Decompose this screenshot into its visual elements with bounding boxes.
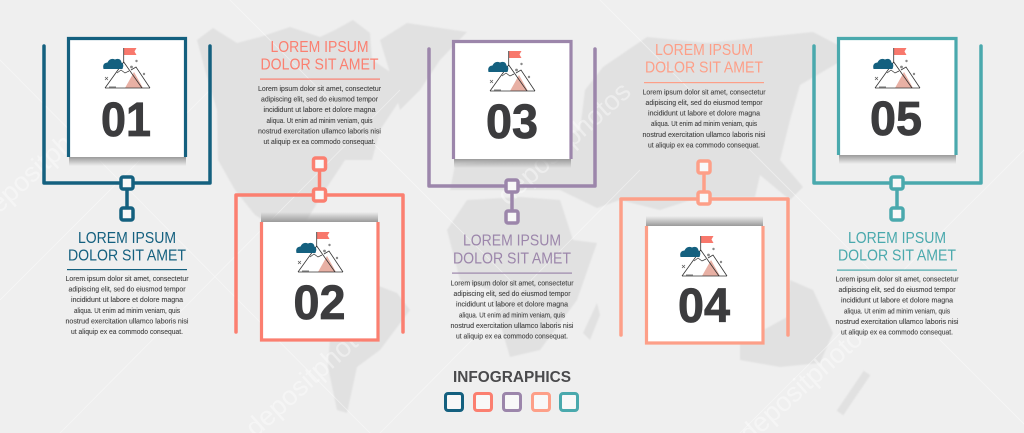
heading 04: DOLOR SIT AMET	[645, 60, 763, 77]
panel: step 03	[429, 42, 595, 340]
rule 01	[67, 269, 187, 270]
number 03: 03	[486, 96, 538, 149]
body text 02: nostrud exercitation ullamco laboris nisi	[258, 126, 381, 135]
rule 03	[452, 272, 572, 274]
connector 04	[698, 161, 710, 204]
rule 02	[260, 78, 380, 80]
panel: step 02	[236, 39, 403, 340]
frame 05	[814, 46, 981, 183]
card 03	[454, 42, 571, 159]
body text 01: ut aliquip ex ea commodo consequat.	[71, 327, 183, 336]
number 05: 05	[870, 93, 922, 146]
body text 04: aliqua. Ut enim ad minim veniam, quis	[651, 119, 757, 128]
body text 04: incididunt ut labore et dolore magna	[648, 109, 761, 118]
icon: mountain flag 01	[103, 48, 150, 88]
body text 01: nostrud exercitation ullamco laboris nisi	[66, 316, 189, 325]
world map	[197, 20, 867, 413]
body text 02: incididunt ut labore et dolore magna	[264, 105, 376, 114]
body text 03: nostrud exercitation ullamco laboris nisi	[450, 321, 574, 330]
body text 05: ut aliquip ex ea commodo consequat.	[841, 328, 953, 336]
heading 03	[453, 232, 571, 268]
card shadow 05	[839, 155, 956, 164]
icon: mountain flag 04	[680, 236, 727, 276]
heading 02: LOREM IPSUM	[270, 39, 368, 56]
heading 05: DOLOR SIT AMET	[838, 248, 956, 265]
card 05	[838, 38, 956, 155]
body text 04	[642, 87, 766, 149]
card 04	[646, 226, 763, 343]
body text 04: Lorem ipsum dolor sit amet, consectetur	[642, 87, 766, 96]
frame 02	[236, 195, 403, 332]
body text 01: aliqua. Ut enim ad minim veniam, quis	[74, 306, 180, 315]
body text 04: adipiscing elit, sed do eiusmod tempor	[646, 98, 763, 107]
body text 03: aliqua. Ut enim ad minim veniam, quis	[459, 310, 565, 319]
body text 05: Lorem ipsum dolor sit amet, consectetur	[836, 274, 959, 284]
body text 05: incididunt ut labore et dolore magna	[841, 296, 954, 305]
body text 03	[450, 278, 574, 340]
body text 01: incididunt ut labore et dolore magna	[71, 295, 184, 304]
heading 02: DOLOR SIT AMET	[260, 56, 379, 74]
card shadow 01	[69, 157, 186, 166]
frame 04	[621, 199, 788, 335]
body text 03: incididunt ut labore et dolore magna	[456, 300, 569, 309]
body text 05	[836, 274, 959, 336]
body text 04: nostrud exercitation ullamco laboris nisi	[642, 130, 766, 139]
body text 01: adipiscing elit, sed do eiusmod tempor	[68, 285, 186, 294]
card shadow 04	[646, 216, 763, 226]
body text 05: adipiscing elit, sed do eiusmod tempor	[838, 285, 956, 294]
heading 03: DOLOR SIT AMET	[453, 250, 571, 268]
number 02: 02	[294, 277, 346, 330]
heading 03: LOREM IPSUM	[463, 232, 561, 250]
icon: mountain flag 02	[296, 232, 343, 272]
icon: mountain flag 05	[873, 48, 920, 88]
connector 02	[314, 158, 326, 201]
body text 02: ut aliquip ex ea commodo consequat.	[264, 137, 376, 146]
body text 02: adipiscing elit, sed do eiusmod tempor	[261, 95, 378, 104]
rule 05	[837, 270, 957, 271]
connector 03	[506, 180, 518, 223]
body text 02: Lorem ipsum dolor sit amet, consectetur	[258, 84, 381, 93]
legend squares	[446, 394, 578, 410]
frame 01	[44, 46, 210, 183]
number 01: 01	[101, 94, 151, 147]
frame 03	[429, 49, 595, 186]
body text 01: Lorem ipsum dolor sit amet, consectetur	[66, 274, 189, 283]
number 04: 04	[678, 280, 730, 333]
body text 02: aliqua. Ut enim ad minim veniam, quis	[266, 116, 373, 125]
heading 01	[68, 230, 186, 265]
heading 01: LOREM IPSUM	[78, 230, 176, 247]
card shadow 02	[261, 212, 378, 222]
watermark: depositphotos	[491, 76, 636, 211]
body text 05: nostrud exercitation ullamco laboris nisi	[836, 317, 959, 326]
panel: step 01	[44, 38, 210, 336]
body text 02	[258, 84, 381, 146]
panel: step 04	[621, 42, 788, 343]
body text 04: ut aliquip ex ea commodo consequat.	[648, 140, 760, 149]
heading 01: DOLOR SIT AMET	[68, 248, 186, 265]
body text 05: aliqua. Ut enim ad minim veniam, quis	[844, 306, 950, 315]
icon: mountain flag 03	[488, 51, 535, 91]
body text 03: adipiscing elit, sed do eiusmod tempor	[454, 289, 571, 298]
heading 04: LOREM IPSUM	[655, 42, 753, 59]
body text 03: ut aliquip ex ea commodo consequat.	[456, 332, 568, 340]
connector 05	[891, 177, 903, 220]
connector 01	[121, 177, 133, 220]
rule 04	[644, 82, 764, 83]
title: infographics: INFOGRAPHICS	[453, 369, 571, 386]
heading 04	[645, 42, 763, 77]
heading 02	[260, 39, 379, 74]
card 02	[262, 222, 378, 340]
body text 03: Lorem ipsum dolor sit amet, consectetur	[450, 278, 574, 288]
heading 05: LOREM IPSUM	[848, 230, 946, 247]
body text 01	[66, 274, 189, 336]
heading 05	[838, 230, 956, 265]
panel: step 05	[814, 38, 981, 336]
card 01	[68, 38, 186, 157]
card shadow 03	[454, 159, 571, 168]
